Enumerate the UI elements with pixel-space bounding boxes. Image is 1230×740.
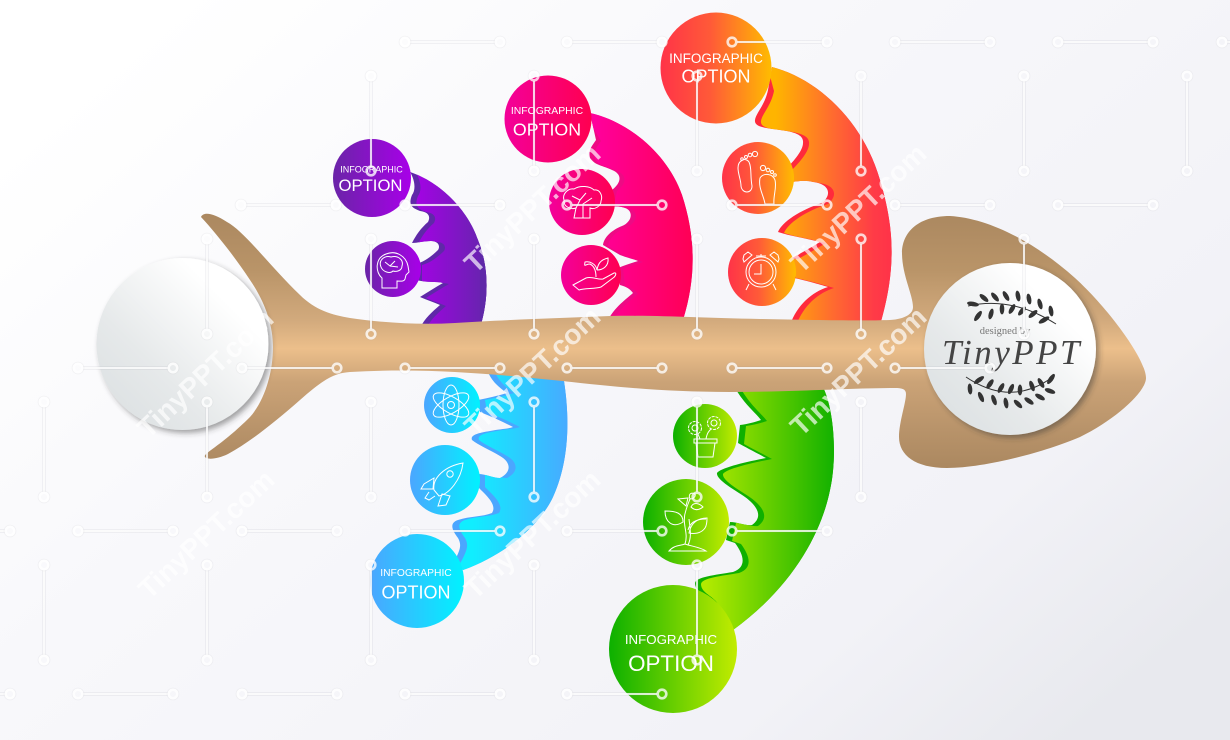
panel: magenta rib <box>589 113 693 317</box>
icon: flower pot <box>673 404 737 468</box>
magenta option circle: INFOGRAPHIC <box>511 106 584 117</box>
panel: purple rib <box>410 172 487 324</box>
panel: green rib <box>695 390 834 630</box>
green option circle: INFOGRAPHIC <box>625 632 718 647</box>
logo: TinyPPT script: TinyPPT <box>942 333 1082 372</box>
blue option circle: OPTION <box>381 582 451 602</box>
icon: alarm clock <box>728 238 796 306</box>
fish skeleton: tail, spine and head <box>201 214 1146 468</box>
logo: bottom wreath <box>966 373 1056 410</box>
icon: brain tree <box>549 169 615 235</box>
green option circle: OPTION <box>628 651 714 676</box>
watermarks <box>131 138 932 605</box>
blue option circle: INFOGRAPHIC <box>380 568 452 579</box>
orange option circle: OPTION <box>681 66 751 86</box>
icon: head with brain <box>365 241 421 297</box>
logo: designed by: designed by <box>980 326 1031 337</box>
green option circle <box>609 585 737 713</box>
orange option circle: INFOGRAPHIC <box>669 51 763 66</box>
orange option circle <box>660 12 772 124</box>
magenta option circle: OPTION <box>513 120 581 140</box>
logo disc <box>924 263 1096 435</box>
purple option circle: OPTION <box>339 176 402 195</box>
icon: hand with sprout <box>561 245 621 305</box>
magenta option circle <box>504 76 592 162</box>
purple option circle <box>333 139 411 217</box>
watermarks: TinyPPT.com <box>784 138 932 279</box>
watermarks: TinyPPT.com <box>458 464 606 605</box>
left white disc <box>96 258 268 430</box>
icon: growing plant <box>643 479 729 565</box>
watermarks: TinyPPT.com <box>458 138 606 279</box>
watermarks: TinyPPT.com <box>458 301 606 442</box>
purple option circle: INFOGRAPHIC <box>340 164 403 174</box>
panel: orange rib <box>754 67 892 320</box>
icon: rocket <box>410 445 480 515</box>
icon: atom <box>424 377 480 433</box>
panel: blue rib <box>452 374 568 570</box>
watermarks: TinyPPT.com <box>132 464 280 605</box>
icon: footprints <box>722 142 794 214</box>
logo: top wreath <box>967 290 1056 325</box>
watermarks: TinyPPT.com <box>131 303 279 444</box>
blue option circle <box>370 534 464 628</box>
watermarks: TinyPPT.com <box>784 301 932 442</box>
